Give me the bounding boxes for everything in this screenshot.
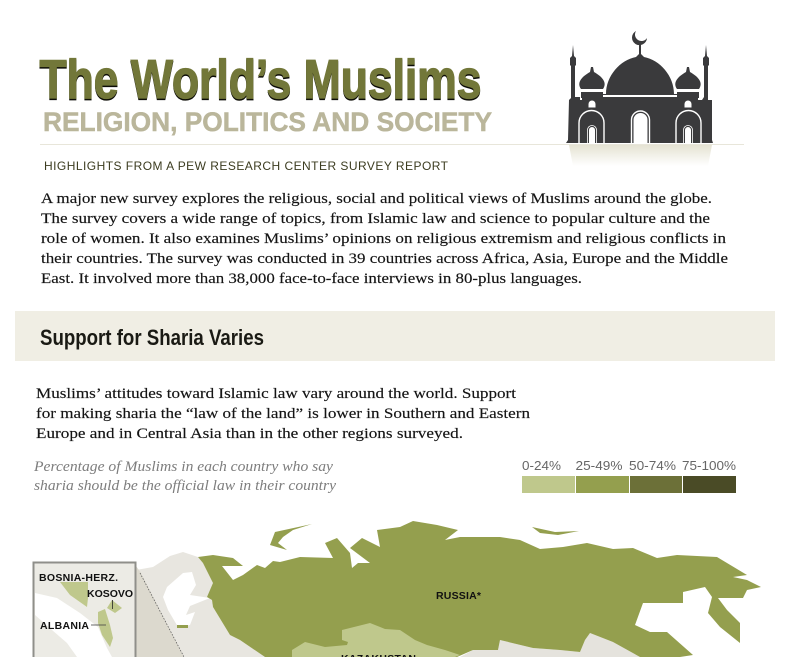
map subtitle: Percentage of Muslims in each country who say xyxy=(33,459,333,475)
subtitle: RELIGION, POLITICS AND SOCIETY xyxy=(43,107,492,137)
Russia label: RUSSIA* xyxy=(436,590,482,602)
legend: 50-74% xyxy=(629,458,676,473)
arrow: Albania xyxy=(91,624,106,626)
Bosnia label: BOSNIA-HERZ. xyxy=(39,572,118,584)
title: The World’s Muslims xyxy=(40,50,482,112)
section band xyxy=(15,311,775,361)
Russia xyxy=(198,521,761,657)
icon: mosque xyxy=(566,31,713,166)
sharia paragraph: Europe and in Central Asia than in the other regions surveyed. xyxy=(36,426,463,442)
Azerbaijan xyxy=(177,625,188,628)
Kosovo label: KOSOVO xyxy=(87,588,133,600)
intro paragraph: East. It involved more than 38,000 face-to-face interviews in 80-plus languages. xyxy=(41,271,582,287)
arrow: Kosovo xyxy=(112,600,114,609)
header rule xyxy=(40,144,744,145)
legend: 0-24% xyxy=(522,458,561,473)
intro paragraph: their countries. The survey was conducted in 39 countries across Africa, Asia, Europe and the Middle xyxy=(41,251,728,267)
sharia paragraph: for making sharia the “law of the land” is lower in Southern and Eastern xyxy=(36,406,531,422)
intro paragraph xyxy=(41,191,728,287)
map subtitle: sharia should be the official law in their country xyxy=(34,478,336,494)
sharia paragraph xyxy=(36,386,531,442)
intro paragraph: The survey covers a wide range of topics, from Islamic law and science to popular culture and the xyxy=(41,211,710,227)
white band xyxy=(603,95,677,97)
map xyxy=(136,521,761,657)
arches xyxy=(579,110,701,143)
land: neighbouring countries xyxy=(136,552,265,657)
water: seas xyxy=(163,572,210,627)
map subtitle xyxy=(33,459,336,494)
section heading: Support for Sharia Varies xyxy=(40,325,264,350)
Albania label: ALBANIA xyxy=(40,620,89,632)
legend: 75-100% xyxy=(682,458,736,473)
highlights line: HIGHLIGHTS FROM A PEW RESEARCH CENTER SURVEY REPORT xyxy=(44,159,449,173)
Novaya Zemlya xyxy=(270,524,312,550)
legend: 25-49% xyxy=(576,458,623,473)
dashed inset leader xyxy=(140,573,184,657)
intro paragraph: A major new survey explores the religious, social and political views of Muslims around the globe. xyxy=(41,191,712,207)
inset: Balkans xyxy=(34,562,136,657)
intro paragraph: role of women. It also examines Muslims’ opinions on religious extremism and religious conflicts in xyxy=(41,231,727,247)
sharia paragraph: Muslims’ attitudes toward Islamic law vary around the world. Support xyxy=(36,386,517,402)
title: The World’s Muslims xyxy=(40,48,482,110)
legend xyxy=(522,458,736,493)
Siberian islands xyxy=(532,527,579,535)
Kazakhstan xyxy=(292,623,460,657)
